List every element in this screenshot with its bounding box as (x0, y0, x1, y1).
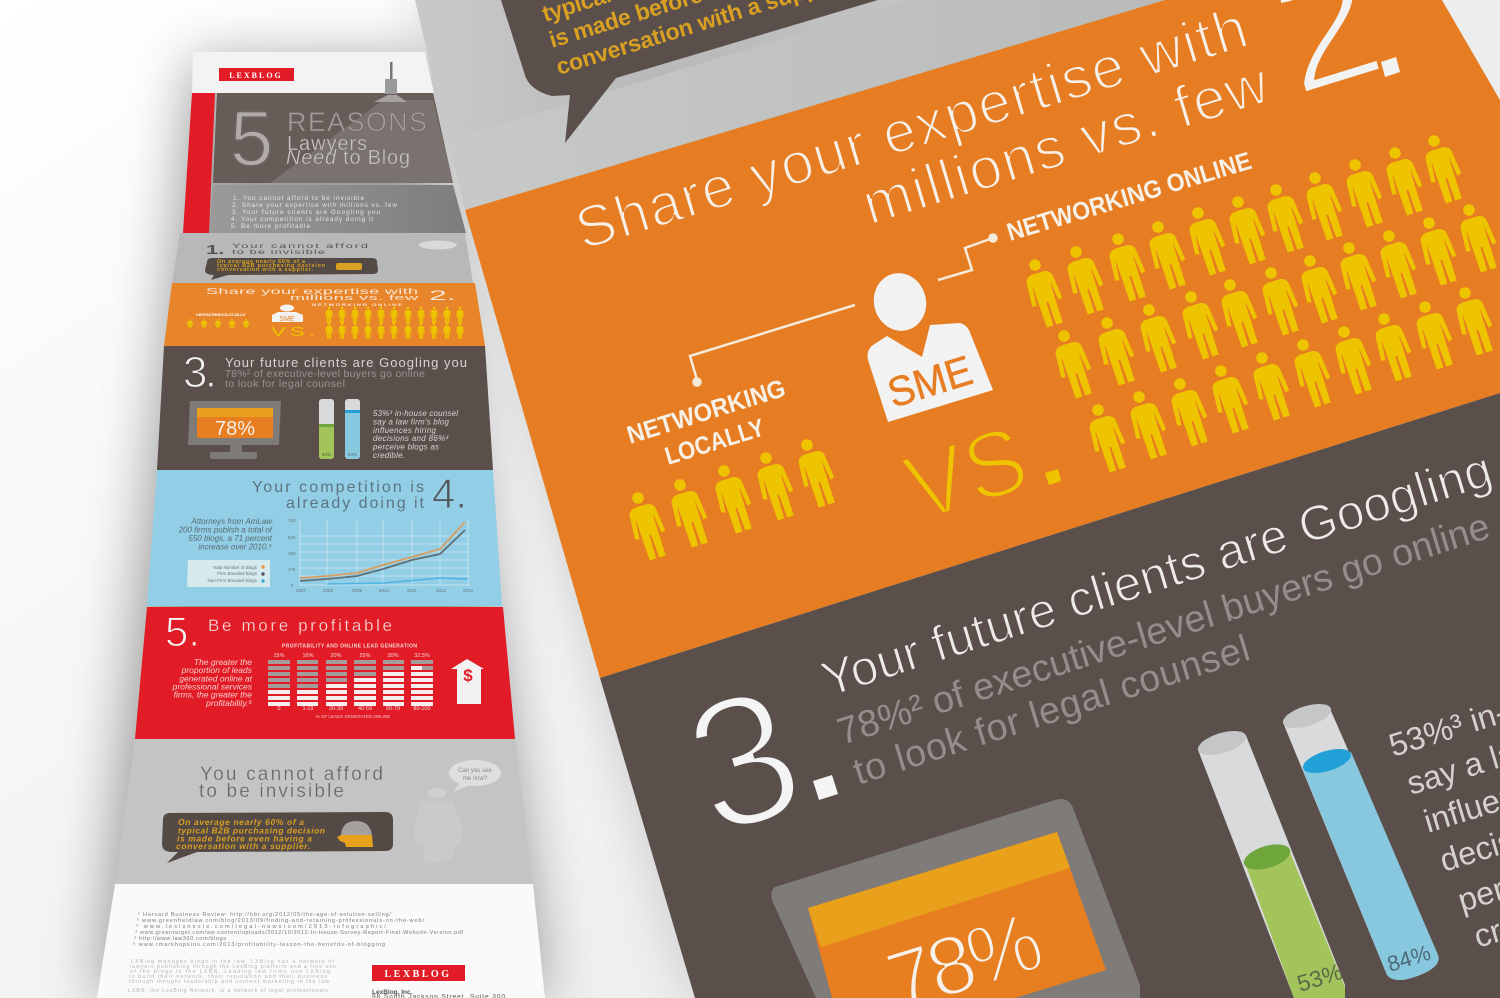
chart: green tube 53% (1195, 726, 1345, 998)
logo: LexBlog top (219, 68, 294, 81)
speech bubble: can you see me: Can you see (458, 768, 492, 774)
icons: small local people (187, 319, 249, 328)
panel: section 1 folded: On average nearly 60% of a (217, 259, 306, 265)
heading: share your expertise: Share your expertise with (568, 0, 1255, 262)
text block: about LexBlog: of the blogs in the LXBN. Leading law firms use LXBlog (130, 969, 330, 975)
panel: section 1 folded: conversation with a supplier. (217, 267, 313, 273)
speech bubble with quote text (501, 0, 878, 143)
subheading text: to look for legal counsel (848, 626, 1254, 793)
legend: Non-Firm Branded Blogs (207, 578, 258, 583)
chart: profitability bars: 1-19 (302, 706, 314, 712)
title: 5 reasons (230, 94, 427, 182)
text block: references: ⁴ www.greentarget.com/wp-content/uploads/2012/10/2012-In-House-Survey-Report-Final-Website-Version.pdf (135, 929, 463, 936)
chart: line chart blogs: 2008 (323, 588, 334, 593)
icon: invisible person (414, 788, 462, 863)
speech bubble small: is made before even having a (177, 834, 312, 844)
panel: section 1 folded: Your cannot afford (232, 243, 368, 250)
panel: section 5 red: Be more profitable (208, 616, 392, 635)
chart: profitability bars: 20-39 (329, 706, 343, 712)
chart: line chart blogs: 0 (291, 583, 294, 588)
chart: line chart blogs: 525 (288, 535, 296, 540)
panel: hero title (213, 62, 453, 183)
text block: address (372, 989, 505, 998)
text block: about LexBlog: lawyers publishing through the LexBlog platform and a free use (130, 964, 336, 970)
heading: share your expertise: millions vs. few (855, 50, 1276, 237)
title: 5 reasons: REASONS (287, 107, 427, 137)
text block: about LexBlog: LXBlog manages blogs in the law. LXBlog has a network of (131, 959, 334, 965)
title: 5 reasons: Lawyers (287, 133, 367, 155)
icon: ceiling lamp (374, 62, 407, 102)
chart: profitability bars: 20% (330, 653, 342, 659)
number 3: 3 (665, 647, 823, 875)
chart: profitability bars: 30% (387, 653, 399, 659)
chart: profitability bars: 16% (302, 653, 314, 659)
chart: line chart blogs: 700 (288, 518, 296, 523)
panel: dark section 3 (600, 393, 1500, 998)
heading: your future clients: Your future clients are Googling (815, 442, 1498, 708)
text block: small in-house: influences hiring (373, 426, 437, 435)
label: networking online: NETWORKING ONLINE (1004, 147, 1255, 247)
icon: head (337, 821, 373, 847)
speech bubble: can you see me: me now? (463, 776, 488, 782)
panel: section 3 dark (157, 346, 493, 470)
chart: profitability bars (268, 653, 433, 719)
chart: profitability bars: 40-59 (358, 706, 372, 712)
text block: small in-house: credible. (373, 451, 405, 460)
subheading text: 78%² of executive-level buyers go online (832, 505, 1494, 753)
panel: section 5 red: 5. (165, 608, 200, 655)
text block: profitability: proportion of leads (181, 665, 253, 675)
text block: about LexBlog: LXBN, the LexBlog Network, is a network of legal professionals (128, 988, 328, 994)
logo: LexBlog bottom: LEXBLOG (385, 969, 451, 980)
panel: section 1 folded: to be invisible (232, 249, 325, 256)
panel: you cannot afford section: to be invisible (199, 781, 344, 802)
panel: zoomed foreground sheet (415, 0, 1500, 998)
panel: section 5 red: PROFITABILITY AND ONLINE LEAD GENERATION (282, 644, 417, 650)
label: networking locally: LOCALLY (662, 414, 768, 471)
panel: section 4 blue: Your competition is (252, 479, 424, 496)
panel: section 4 blue (147, 470, 502, 606)
panel: section 3 dark: 78%² of executive-level buyers go online (225, 368, 425, 380)
speech bubble small (162, 812, 393, 863)
panel: reasons list: 5. Be more profitable (231, 223, 310, 230)
chart: small tubes: 84% (348, 452, 357, 457)
text block: AmLaw: 200 firms publish a total of (178, 526, 273, 534)
logo: LexBlog bottom (372, 965, 465, 981)
panel: section 3 dark: to look for legal counsel (225, 378, 345, 390)
text block: profitability: generated online at (179, 674, 253, 684)
text block: about LexBlog (128, 959, 336, 994)
chart: line chart blogs: 2010 (379, 588, 390, 593)
text block: references: ¹ Harvard Business Review: http://hbr.org/2012/05/the-age-of-solution-selling/ (138, 912, 391, 918)
text block: profitability: firms, the greater the (174, 690, 252, 700)
panel: reasons list: 3. Your future clients are Googling you (232, 209, 380, 216)
text block: references: ⁶ www.rmarkhopkins.com/2013/profitability-lesson-the-benefits-of-blogging (133, 941, 385, 948)
chart: profitability bars: 25% (359, 653, 371, 659)
panel: section 5 red (135, 607, 515, 739)
chart: line chart blogs: 2009 (352, 588, 363, 593)
chart: line chart blogs: 2011 (407, 588, 417, 593)
panel: section 2 folded orange: millions vs. few (290, 293, 418, 302)
logo: LexBlog top: LEXBLOG (229, 71, 283, 80)
text block: about LexBlog: to build their network, their reputation and their business (129, 974, 327, 980)
panel: you cannot afford section: You cannot afford (200, 764, 383, 785)
panel: reasons list: 4. Your competition is already doing it (231, 216, 373, 223)
text block: address: LexBlog, Inc. (372, 989, 413, 996)
text block: AmLaw (178, 517, 273, 552)
icon: small monitor (188, 401, 281, 459)
chart: small tubes: 53% (322, 452, 331, 457)
panel: grey invisible section (415, 0, 1170, 210)
panel: section 2 folded orange (164, 283, 485, 346)
panel: section 3 dark: 3. (183, 348, 217, 397)
panel: reasons list (209, 185, 466, 233)
panel: section 4 blue: 4. (432, 470, 467, 517)
text block: AmLaw: increase over 2010.⁵ (198, 542, 273, 552)
red side bar (183, 93, 215, 233)
text block: profitability (172, 657, 253, 708)
icon: SME person (867, 267, 993, 422)
text block: small in-house: 53%³ in-house counsel (373, 409, 458, 418)
chart: profitability bars: 32.5% (414, 653, 430, 659)
text block: profitability: The greater the (194, 657, 252, 667)
title: 5 reasons: Need to Blog (286, 147, 410, 169)
panel: reasons list: 2. Share your expertise with millions vs. few (232, 202, 397, 209)
panel: section 2 folded orange: NETWORKING ONLINE (312, 303, 403, 307)
chart: line chart blogs: 175 (288, 567, 296, 572)
panel: section 4 blue: already doing it (286, 495, 425, 512)
text block: references: ³ www.lexisnexis.com/legal-newsroom/2013-infographic/ (136, 924, 386, 930)
icon: small monitor: 78% (215, 418, 255, 440)
speech bubble: can you see me (449, 760, 501, 792)
panel: section 3 dark: Your future clients are Googling you (225, 355, 467, 370)
panel: section 1 folded: typical B2B purchasing decision (217, 263, 326, 269)
legend: Firm Branded Blogs (217, 571, 258, 576)
text block: AmLaw: Attorneys from AmLaw (190, 517, 273, 526)
corner background (1442, 0, 1500, 100)
arrow: connector to online (938, 234, 996, 280)
icons: online people (1018, 131, 1500, 475)
legend: Total Number of Blogs (213, 565, 258, 570)
chart: profitability bars: 60-79 (386, 706, 400, 712)
icon: SME person: SME (882, 346, 978, 417)
chart: green tube 53%: 53% (1294, 958, 1345, 997)
chart: line chart blogs: 2012 (436, 588, 447, 593)
icon: small SME (272, 304, 303, 323)
chart: profitability bars: % OF LEADS GENERATED ONLINE (316, 714, 390, 719)
icon: monitor 78% (771, 799, 1140, 998)
text block: small in-house (372, 409, 458, 460)
chart: blue tube 84% (1280, 699, 1439, 980)
panel: section 1 folded: 1. (206, 242, 224, 257)
text block: references: ² www.greenfieldlaw.com/blog/2013/09/finding-and-retaining-professionals-on-the-web/ (137, 918, 424, 924)
speech bubble small: On average nearly 60% of a (178, 817, 304, 827)
panel: section 1 folded (172, 233, 473, 283)
chart: small tubes (319, 399, 360, 459)
text block: small in-house: say a law firm's blog (373, 418, 450, 426)
panel: you cannot afford section (115, 739, 533, 884)
panel: footer (97, 884, 545, 998)
speech bubble small: conversation with a supplier. (176, 841, 310, 851)
chart: line chart blogs (288, 518, 474, 593)
panel: section 2 folded orange: NETWORKING LOCALLY (196, 313, 247, 317)
text block: profitability: professional services (172, 682, 253, 692)
text block: in-house counsel (1385, 632, 1500, 955)
icon: dollar arrow: $ (463, 666, 473, 685)
icons: local people (621, 435, 842, 563)
icon: dollar arrow (451, 659, 484, 704)
label: VS: VS (894, 405, 1039, 541)
chart: line chart blogs: 350 (288, 551, 296, 556)
chart: profitability bars: 80-100 (413, 706, 431, 712)
text block: references: ⁵ http://www.law360.com/blogs (134, 935, 226, 942)
icon: small SME: SME (279, 316, 295, 323)
text block: profitability: profitability.⁶ (205, 698, 252, 708)
text block: small in-house: perceive blogs as (372, 442, 439, 452)
chart: profitability bars: 15% (273, 653, 285, 659)
panel: section 2 folded orange: Share your expertise with (206, 286, 418, 296)
text block: small in-house: decisions and 86%⁴ (373, 434, 450, 443)
legend (187, 560, 270, 587)
text block: references (133, 912, 463, 948)
panel: reasons list: 1. You cannot afford to be invisible (233, 195, 364, 202)
text block: AmLaw: 550 blogs, a 71 percent (188, 534, 273, 543)
panel: white header (192, 52, 434, 93)
chart: line chart blogs: 2007 (296, 588, 307, 593)
panel: orange section 2 (465, 0, 1500, 678)
chart: blue tube 84%: 84% (1384, 940, 1433, 977)
chart: line chart blogs: 2013 (463, 588, 474, 593)
label: networking locally: NETWORKING (624, 374, 789, 450)
speech bubble small: typical B2B purchasing decision (178, 826, 325, 836)
panel: section 2 folded orange: VS. (271, 324, 315, 339)
icons: small online people (325, 307, 464, 339)
text block: about LexBlog: through thought leadership and content marketing in the law (129, 979, 329, 985)
panel: section 2 folded orange: 2. (429, 288, 456, 303)
chart: profitability bars: 0 (277, 706, 281, 712)
arrow: connector to local (690, 305, 855, 386)
title: 5 reasons: 5 (230, 94, 273, 182)
panel: full infographic strip (97, 52, 545, 998)
